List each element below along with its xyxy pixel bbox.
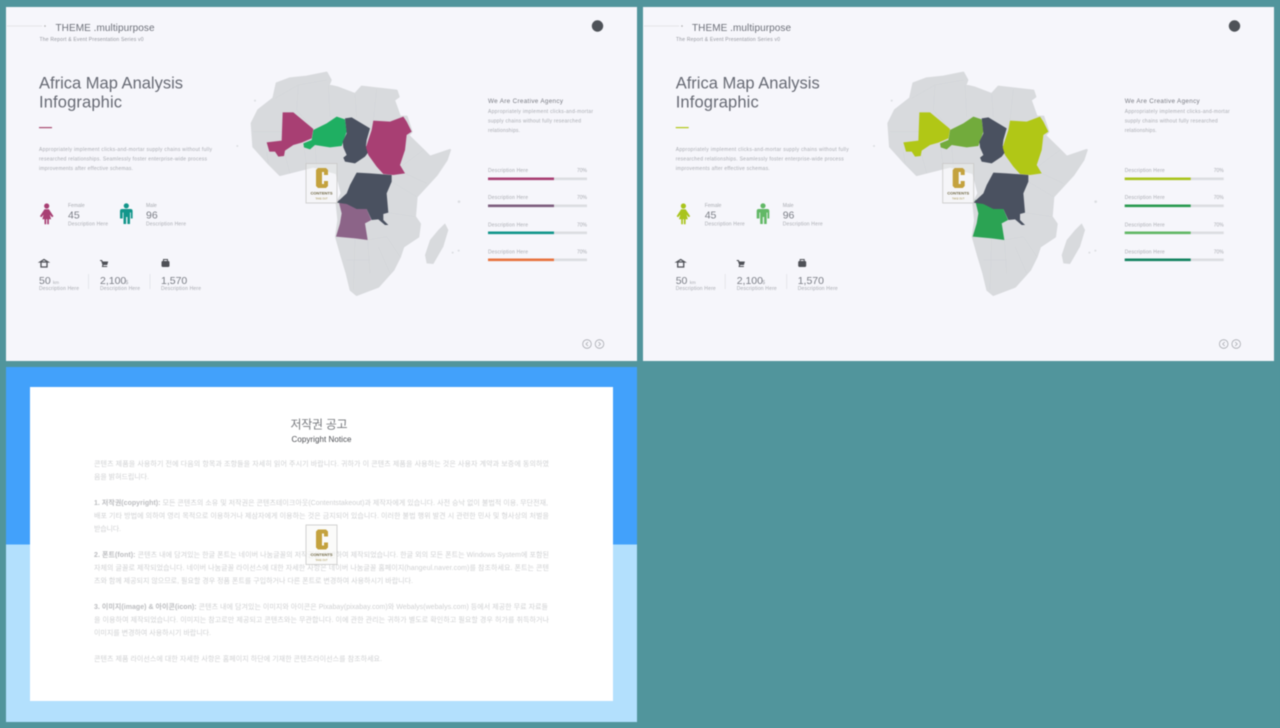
bar 4: Description Here <box>488 250 528 256</box>
bar 3 <box>1125 222 1224 234</box>
progress bars <box>1125 168 1224 261</box>
intro paragraph: researched relationships. Seamlessly foster enterprise-wide process <box>39 156 208 162</box>
stat: distance: 50 <box>39 275 51 287</box>
logo: TAKE OUT <box>315 198 328 200</box>
title: Africa Map Analysis <box>39 74 183 92</box>
stat: female <box>705 203 745 228</box>
copyright subheading: Copyright Notice <box>292 435 352 444</box>
stat: female: Description Here <box>68 222 108 228</box>
stat: count: Description Here <box>798 286 838 292</box>
stat: distance <box>39 275 79 292</box>
right text block: Appropriately implement clicks-and-mortar <box>1125 109 1230 115</box>
header theme name: THEME .multipurpose <box>56 23 155 34</box>
accent dash <box>676 127 689 128</box>
copyright body text: 2. 폰트(font): 콘텐츠 내에 담겨있는 한글 폰트는 네이버 나눔글꼴의 저작권을 기반하여 제작되었습니다. 한글 외의 모든 폰트는 Windows System에 포함된 <box>94 550 549 559</box>
stat: male <box>783 203 823 228</box>
country: DR Congo <box>973 173 1028 225</box>
bar 2: 70% <box>577 195 588 201</box>
bar 3: Description Here <box>1125 222 1165 228</box>
stat: male <box>146 203 186 228</box>
copyright body text: 3. 이미지(image) & 아이콘(icon): 콘텐츠 내에 담겨있는 이미지와 아이콘은 Pixabay(pixabay.com)와 Webalys(webalys.com) 등에서 제공한 무료 자료들 <box>94 602 549 611</box>
icon: top-right dot <box>592 20 603 32</box>
continent outline <box>252 73 450 295</box>
logo: TAKE OUT <box>315 559 328 562</box>
stat: female: 45 <box>705 210 717 222</box>
progress bars <box>488 168 588 261</box>
bar 2: Description Here <box>1125 195 1165 201</box>
stat: distance: km <box>690 280 696 285</box>
panel: right slide, green theme <box>643 7 1274 361</box>
icon: bag <box>162 260 170 267</box>
stat: count: 1,570 <box>798 275 824 287</box>
bar 3: 70% <box>577 222 588 228</box>
country: Sudan <box>1003 117 1048 175</box>
bar 2: Description Here <box>488 195 528 201</box>
accent dash <box>39 127 52 128</box>
header subtitle: The Report & Event Presentation Series v0 <box>40 37 144 43</box>
logo: CONTENTS <box>947 190 970 196</box>
logo: CONTENTS <box>310 552 333 557</box>
copyright body text: 음을 밝혀드립니다. <box>94 472 149 481</box>
intro paragraph: improvements after effective schemas. <box>39 166 133 172</box>
stat: female: Female <box>705 203 722 209</box>
icon: female <box>40 203 54 224</box>
panel: left slide, magenta theme <box>6 7 637 361</box>
country: Mali <box>903 112 950 157</box>
icon: store <box>40 260 48 267</box>
country: Sudan <box>366 117 412 175</box>
navigation arrows <box>583 340 604 348</box>
logo <box>306 525 337 564</box>
logo <box>306 164 337 203</box>
title: Infographic <box>39 94 122 112</box>
stat: sales <box>737 275 777 292</box>
title: Africa Map Analysis <box>676 74 820 92</box>
logo: TAKE OUT <box>952 198 965 200</box>
icon: cart <box>737 260 745 267</box>
logo <box>943 164 974 203</box>
logo: CONTENTS <box>310 190 333 196</box>
copyright body text: 츠와 함께 제공되지 않으므로, 필요할 경우 정품 폰트를 구입하거나 다른 폰트로 변경하여 사용하시기 바랍니다. <box>94 576 413 585</box>
right text block: relationships. <box>1125 128 1157 134</box>
stat: sales: $ <box>126 280 128 286</box>
right text block <box>488 98 593 134</box>
header theme name: THEME .multipurpose <box>692 23 791 34</box>
stat: sales <box>100 275 140 292</box>
bar 4: Description Here <box>1125 250 1165 256</box>
map: Africa <box>236 73 460 295</box>
copyright body text <box>94 459 550 663</box>
copyright body text: 이미지를 변경하여 사용하시기 바랍니다. <box>94 628 211 637</box>
country: Niger <box>303 117 347 149</box>
stat: sales: $ <box>762 280 765 286</box>
continent outline <box>888 73 1087 295</box>
right text block: relationships. <box>488 128 520 134</box>
stat: count <box>161 275 201 292</box>
bar 4: 70% <box>1214 250 1224 256</box>
stat: male: Male <box>783 203 794 209</box>
stat: sales: 2,100 <box>100 275 126 287</box>
bar 1: 70% <box>1214 168 1224 174</box>
navigation arrows <box>1219 340 1240 348</box>
stat: sales: 2,100 <box>737 275 763 287</box>
country: Angola <box>973 200 1008 240</box>
right text block <box>1125 98 1230 134</box>
stat: distance <box>676 275 716 292</box>
right text block: supply chains without fully researched <box>1125 118 1218 124</box>
stat: distance: Description Here <box>39 286 79 292</box>
icon: cart <box>100 260 108 267</box>
bar 2 <box>1125 195 1224 207</box>
bar 1: Description Here <box>488 168 528 174</box>
bar 1 <box>1125 168 1224 180</box>
copyright body text: 을 이용하여 제작되었습니다. 이미지는 참고로만 제공되고 콘텐츠와는 무관합니다. 이에 관한 관리는 귀하가 별도로 확인하고 필요할 경우 허가를 취득하거나 <box>94 615 550 624</box>
stat: count: 1,570 <box>161 275 187 287</box>
bar 4 <box>1125 250 1224 261</box>
stat: female <box>68 203 108 228</box>
stat: count: Description Here <box>161 286 201 292</box>
stat: male: Male <box>146 203 157 209</box>
header subtitle: The Report & Event Presentation Series v0 <box>676 37 780 43</box>
copyright body text: 받습니다. <box>94 524 121 533</box>
stat: sales: Description Here <box>100 286 140 292</box>
intro paragraph: Appropriately implement clicks-and-mortar supply chains without fully <box>676 147 849 153</box>
right text block: supply chains without fully researched <box>488 118 581 124</box>
country: Mali <box>267 112 313 157</box>
stat: female: Female <box>68 203 85 209</box>
stat: distance: km <box>53 280 59 285</box>
icon: male <box>120 203 133 224</box>
stat: sales: Description Here <box>737 286 777 292</box>
bar 1: 70% <box>577 168 588 174</box>
copyright body text: 콘텐츠 제품을 사용하기 전에 다음의 항목과 조항들을 자세히 읽어 주시기 바랍니다. 귀하가 이 콘텐츠 제품을 사용하는 것은 사용자 계약과 보증에 동의하였 <box>94 459 550 468</box>
bar 3: Description Here <box>488 222 528 228</box>
copyright heading: 저작권 공고 <box>290 418 348 432</box>
intro paragraph: Appropriately implement clicks-and-mortar supply chains without fully <box>39 147 212 153</box>
right text block: We Are Creative Agency <box>1125 98 1201 105</box>
icon: male <box>757 203 769 224</box>
icon: bag <box>798 260 806 267</box>
bar 4 <box>488 250 588 261</box>
stat: female: 45 <box>68 210 80 222</box>
country: Niger <box>940 117 983 149</box>
country: Angola <box>336 200 371 240</box>
stat: male: 96 <box>783 210 795 222</box>
stat: count <box>798 275 838 292</box>
country: Chad <box>343 117 370 163</box>
bar 2: 70% <box>1214 195 1224 201</box>
bar 1: Description Here <box>1125 168 1165 174</box>
bar 3: 70% <box>1214 222 1224 228</box>
country: Chad <box>979 117 1007 163</box>
intro paragraph: improvements after effective schemas. <box>676 166 770 172</box>
stat: distance: 50 <box>676 275 688 287</box>
title: Infographic <box>676 94 759 112</box>
country: DR Congo <box>337 173 392 225</box>
bar 4: 70% <box>577 250 588 256</box>
right text block: We Are Creative Agency <box>488 98 564 105</box>
right text block: Appropriately implement clicks-and-mortar <box>488 109 593 115</box>
bar 3 <box>488 222 588 234</box>
copyright body text: 자체의 글꼴로 제작되었습니다. 네이버 나눔글꼴 라이선스에 대한 자세한 사항은 네이버 나눔글꼴 홈페이지(hangeul.naver.com)를 참조하세요. 폰트는 콘텐 <box>94 563 549 572</box>
Madagascar <box>1062 223 1085 264</box>
copyright body text: 1. 저작권(copyright): 모든 콘텐츠의 소유 및 저작권은 콘텐츠테이크아웃(Contentstakeout)과 제작자에게 있습니다. 사전 승낙 없이 불법적 이용, 무단전재, <box>94 498 548 507</box>
icon: female <box>677 203 690 224</box>
map: Africa <box>873 73 1097 295</box>
icon: store <box>677 260 685 267</box>
intro paragraph: researched relationships. Seamlessly foster enterprise-wide process <box>676 156 844 162</box>
copyright body text: 배포 기타 방법에 의하여 영리 목적으로 이용하거나 제삼자에게 이용하는 것은 금지되어 있습니다. 이러한 불법 행위 발견 시 관련한 민사 및 형사상의 처벌을 <box>94 511 550 520</box>
bar 2 <box>488 195 588 207</box>
stat: male: 96 <box>146 210 158 222</box>
copyright body text: 콘텐츠 제품 라이선스에 대한 자세한 사항은 홈페이지 하단에 기재한 콘텐츠라이선스를 참조하세요. <box>94 654 382 663</box>
Madagascar <box>425 223 448 264</box>
stat: female: Description Here <box>705 222 745 228</box>
stat: male: Description Here <box>783 222 823 228</box>
icon: top-right dot <box>1229 20 1240 32</box>
stat: male: Description Here <box>146 222 186 228</box>
panel: copyright notice <box>6 367 637 722</box>
stat: distance: Description Here <box>676 286 716 292</box>
bar 1 <box>488 168 588 180</box>
